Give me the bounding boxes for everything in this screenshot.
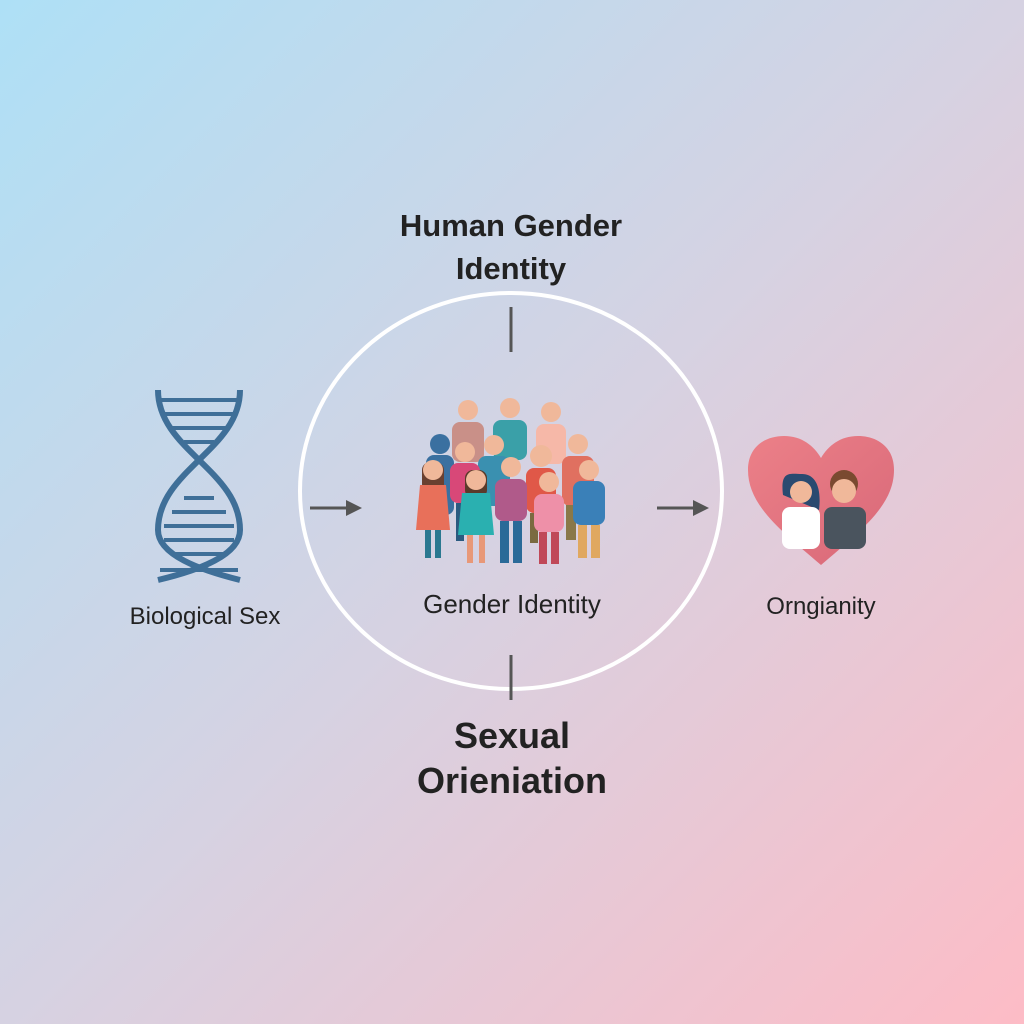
- label: sexual orientation: Orieniation: [417, 760, 607, 801]
- label: biological sex: Biological Sex: [130, 603, 280, 630]
- label: gender identity: Gender Identity: [423, 589, 601, 619]
- label: orngianity: Orngianity: [766, 593, 876, 620]
- label: sexual orientation: Sexual: [454, 715, 570, 756]
- arrow right: [657, 500, 709, 516]
- icon: heart with couple: [748, 436, 894, 565]
- central circle: [300, 293, 722, 689]
- bottom connector: [510, 655, 512, 700]
- icon: DNA: [158, 390, 240, 580]
- top connector: [510, 307, 512, 352]
- arrow left: [310, 500, 362, 516]
- title: Identity: [456, 251, 567, 286]
- icon: group of people: [416, 398, 605, 564]
- title: Human Gender: [400, 208, 622, 243]
